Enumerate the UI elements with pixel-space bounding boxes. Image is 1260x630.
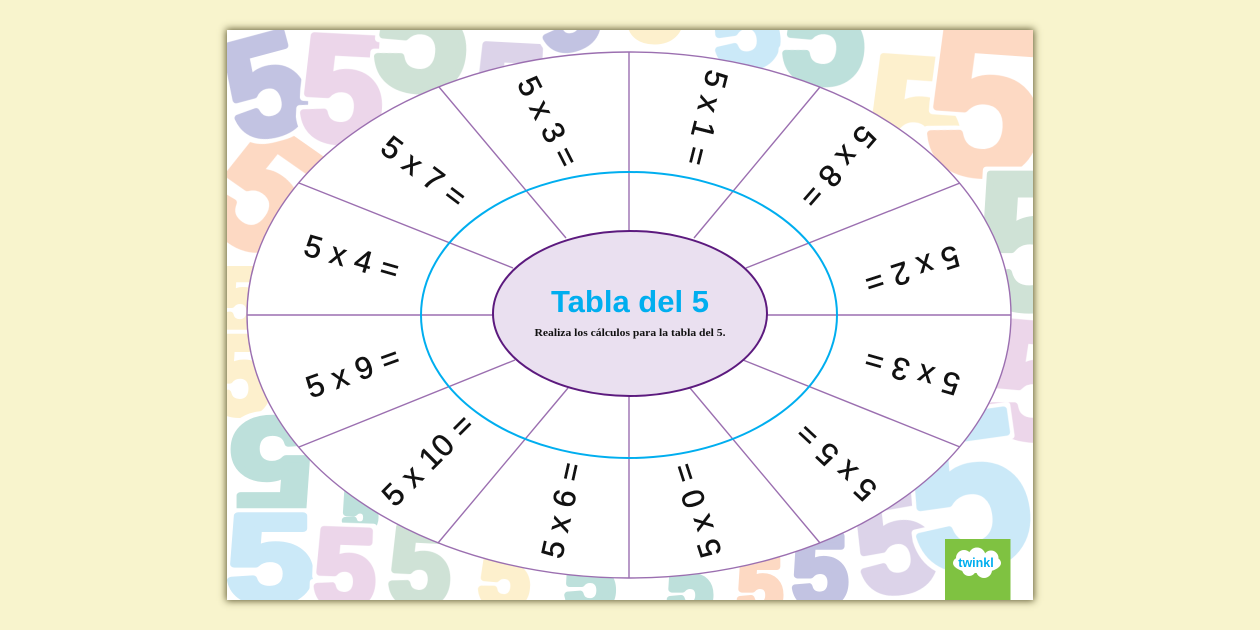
question 5 x 6: 5 x 6 = [534,459,590,561]
title: Tabla del 5 [551,284,709,319]
question 5 x 8: 5 x 8 = [793,119,883,215]
background pattern of pastel fives: 5 [230,392,314,537]
multiplication questions [300,66,964,562]
twinkl logo [945,539,1010,600]
outer wheel ellipse [247,52,1011,578]
question 5 x 3 top: 5 x 3 = [510,71,586,173]
blue middle ring [421,172,837,458]
central ellipse [493,231,767,396]
question 5 x 1: 5 x 1 = [677,66,735,170]
question 5 x 7: 5 x 7 = [375,129,473,215]
question 5 x 2: 5 x 2 = [860,238,964,302]
question 5 x 4: 5 x 4 = [300,228,404,288]
background pattern of pastel fives: 5 [343,477,377,544]
question 5 x 10: 5 x 10 = [375,407,481,513]
twinkl logo: twinkl [958,556,994,570]
question 5 x 0: 5 x 0 = [665,458,729,562]
question 5 x 3 right: 5 x 3 = [860,342,964,402]
question 5 x 9: 5 x 9 = [301,339,405,405]
question 5 x 5: 5 x 5 = [788,416,884,508]
subtitle: Realiza los cálculos para la tabla del 5. [534,327,726,339]
worksheet panel with pastel fives background [227,30,1033,600]
background pattern of pastel fives [171,0,1089,630]
wheel spokes [247,52,1011,578]
